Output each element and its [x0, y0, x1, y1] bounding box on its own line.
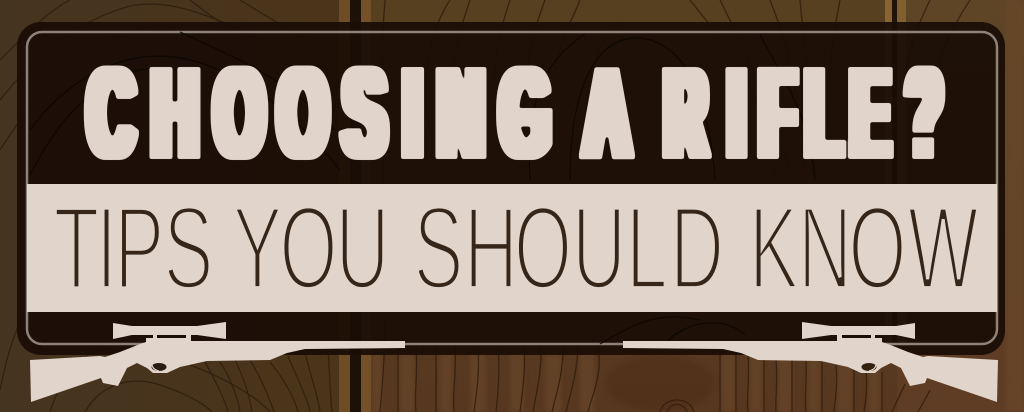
- dark knot area: [605, 356, 715, 412]
- title: RIFLE?: [665, 43, 942, 184]
- subtitle: KNOW: [749, 182, 978, 313]
- subtitle: TIPS: [54, 182, 213, 313]
- icon: right rifle: [623, 322, 998, 402]
- subtitle: SHOULD: [413, 182, 724, 313]
- title: CHOOSING: [88, 44, 550, 184]
- subtitle band: [27, 184, 997, 312]
- top seam on right plank: [885, 0, 892, 345]
- title: A: [584, 44, 630, 184]
- light stripes: [372, 0, 1024, 412]
- title: [88, 43, 942, 184]
- subtitle: YOU: [232, 182, 390, 313]
- subtitle: [54, 182, 978, 313]
- icon: left rifle: [30, 322, 405, 402]
- dark sign panel: [17, 22, 1005, 355]
